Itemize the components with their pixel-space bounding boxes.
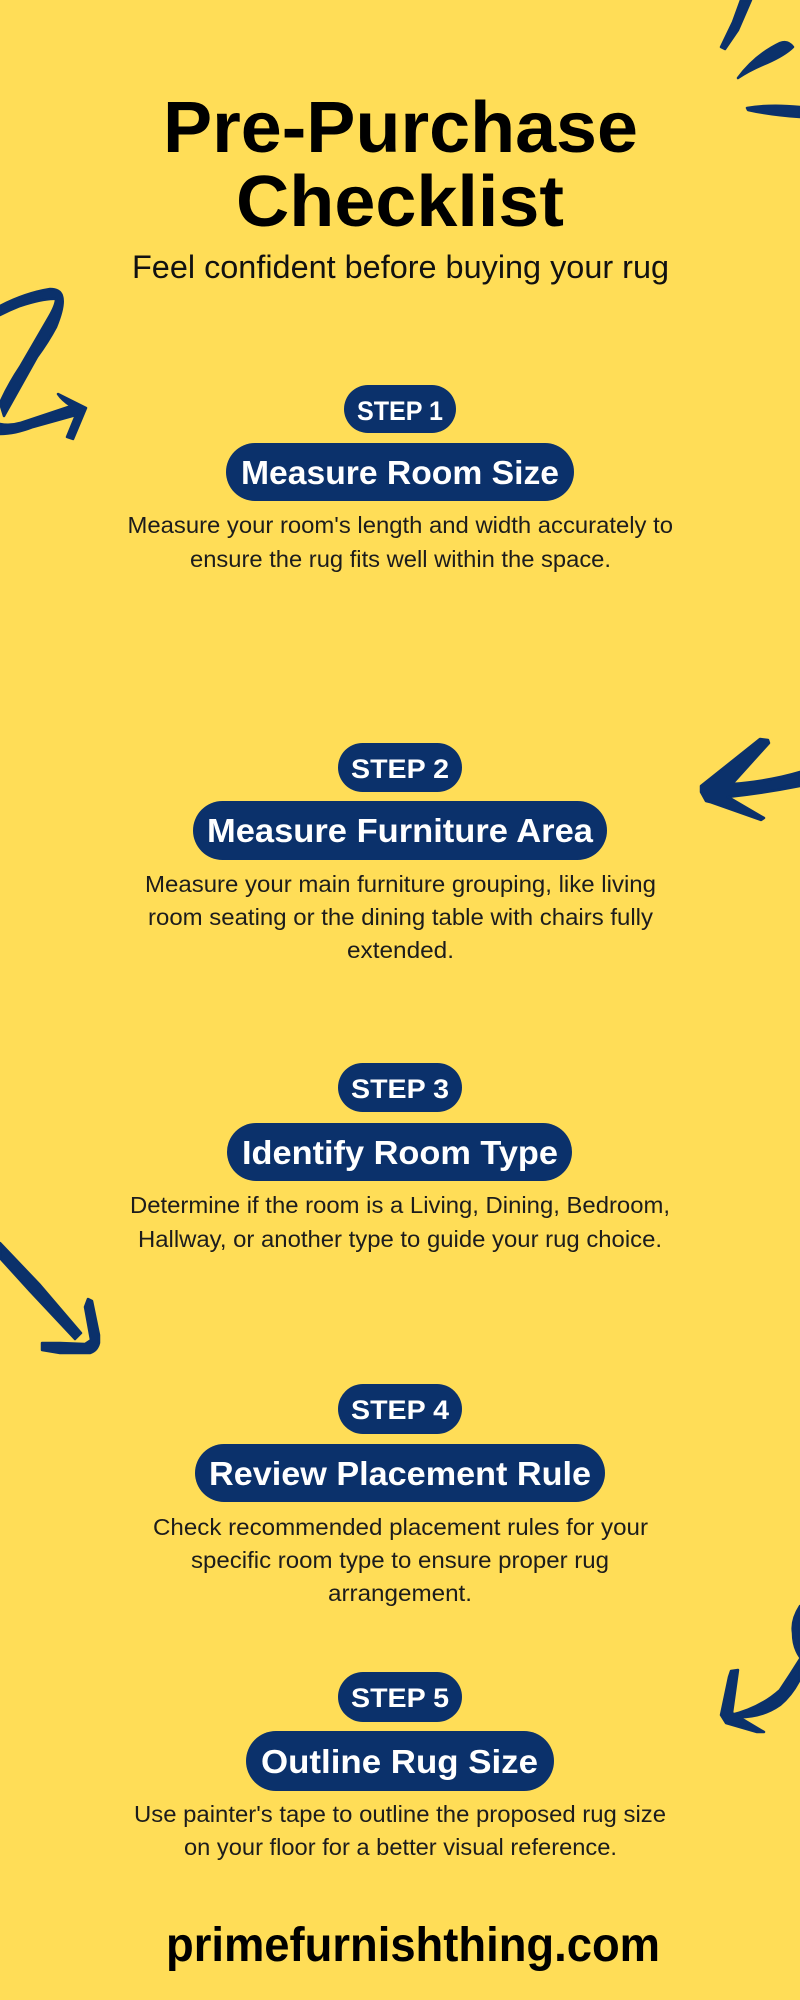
footer website: primefurnishthing.com	[166, 1919, 660, 1972]
step 3 heading: Identify Room Type	[242, 1134, 558, 1171]
step 3 description: Hallway, or another type to guide your rug choice.	[138, 1226, 662, 1252]
step 2 description: room seating or the dining table with chairs fully	[148, 904, 653, 930]
step 2 description	[145, 871, 656, 963]
arrow: left squiggle pointing right	[0, 289, 86, 439]
step 5 badge	[338, 1672, 462, 1722]
icon: top-right burst strokes	[721, 0, 800, 117]
step 4	[153, 1384, 648, 1606]
step 5 description: on your floor for a better visual reference.	[184, 1834, 617, 1860]
step 2 heading	[193, 801, 607, 860]
step 4 badge: STEP 4	[351, 1395, 449, 1425]
step 5 heading: Outline Rug Size	[261, 1743, 538, 1780]
step 5 description	[134, 1801, 666, 1860]
step 2 description: Measure your main furniture grouping, like living	[145, 871, 656, 897]
arrow: right side pointing left	[701, 739, 800, 820]
step 2	[145, 743, 656, 963]
title: Checklist	[236, 162, 564, 242]
step 2 description: extended.	[347, 937, 454, 963]
step 1 heading: Measure Room Size	[241, 454, 559, 491]
step 2 heading: Measure Furniture Area	[207, 812, 594, 849]
step 1	[128, 385, 673, 572]
step 1 description: ensure the rug fits well within the space.	[190, 546, 611, 572]
arrow: right side curling down-left	[721, 1606, 800, 1732]
step 1 badge	[344, 385, 456, 433]
step 4 description: specific room type to ensure proper rug	[191, 1547, 609, 1573]
step 3 description	[130, 1192, 670, 1252]
title	[163, 88, 638, 242]
step 4 badge	[338, 1384, 462, 1434]
step 3 badge: STEP 3	[351, 1074, 449, 1104]
subtitle: Feel confident before buying your rug	[132, 249, 669, 285]
step 5 badge: STEP 5	[351, 1683, 449, 1713]
step 5 description: Use painter's tape to outline the proposed rug size	[134, 1801, 666, 1827]
step 3 description: Determine if the room is a Living, Dining, Bedroom,	[130, 1192, 670, 1218]
step 4 description	[153, 1514, 648, 1606]
step 2 badge: STEP 2	[351, 754, 449, 784]
title: Pre-Purchase	[163, 88, 638, 168]
arrow: left side pointing down-right	[0, 1243, 99, 1353]
step 1 badge: STEP 1	[357, 396, 443, 426]
step 3 heading	[227, 1123, 572, 1181]
step 3	[130, 1063, 670, 1252]
step 4 description: arrangement.	[328, 1580, 472, 1606]
step 3 badge	[338, 1063, 462, 1112]
step 4 description: Check recommended placement rules for your	[153, 1514, 648, 1540]
step 2 badge	[338, 743, 462, 792]
step 4 heading	[195, 1444, 605, 1502]
step 1 description: Measure your room's length and width accurately to	[128, 512, 673, 538]
step 5	[134, 1672, 666, 1860]
step 1 heading	[226, 443, 574, 501]
step 5 heading	[246, 1731, 554, 1791]
step 1 description	[128, 512, 673, 572]
step 4 heading: Review Placement Rule	[209, 1455, 591, 1492]
